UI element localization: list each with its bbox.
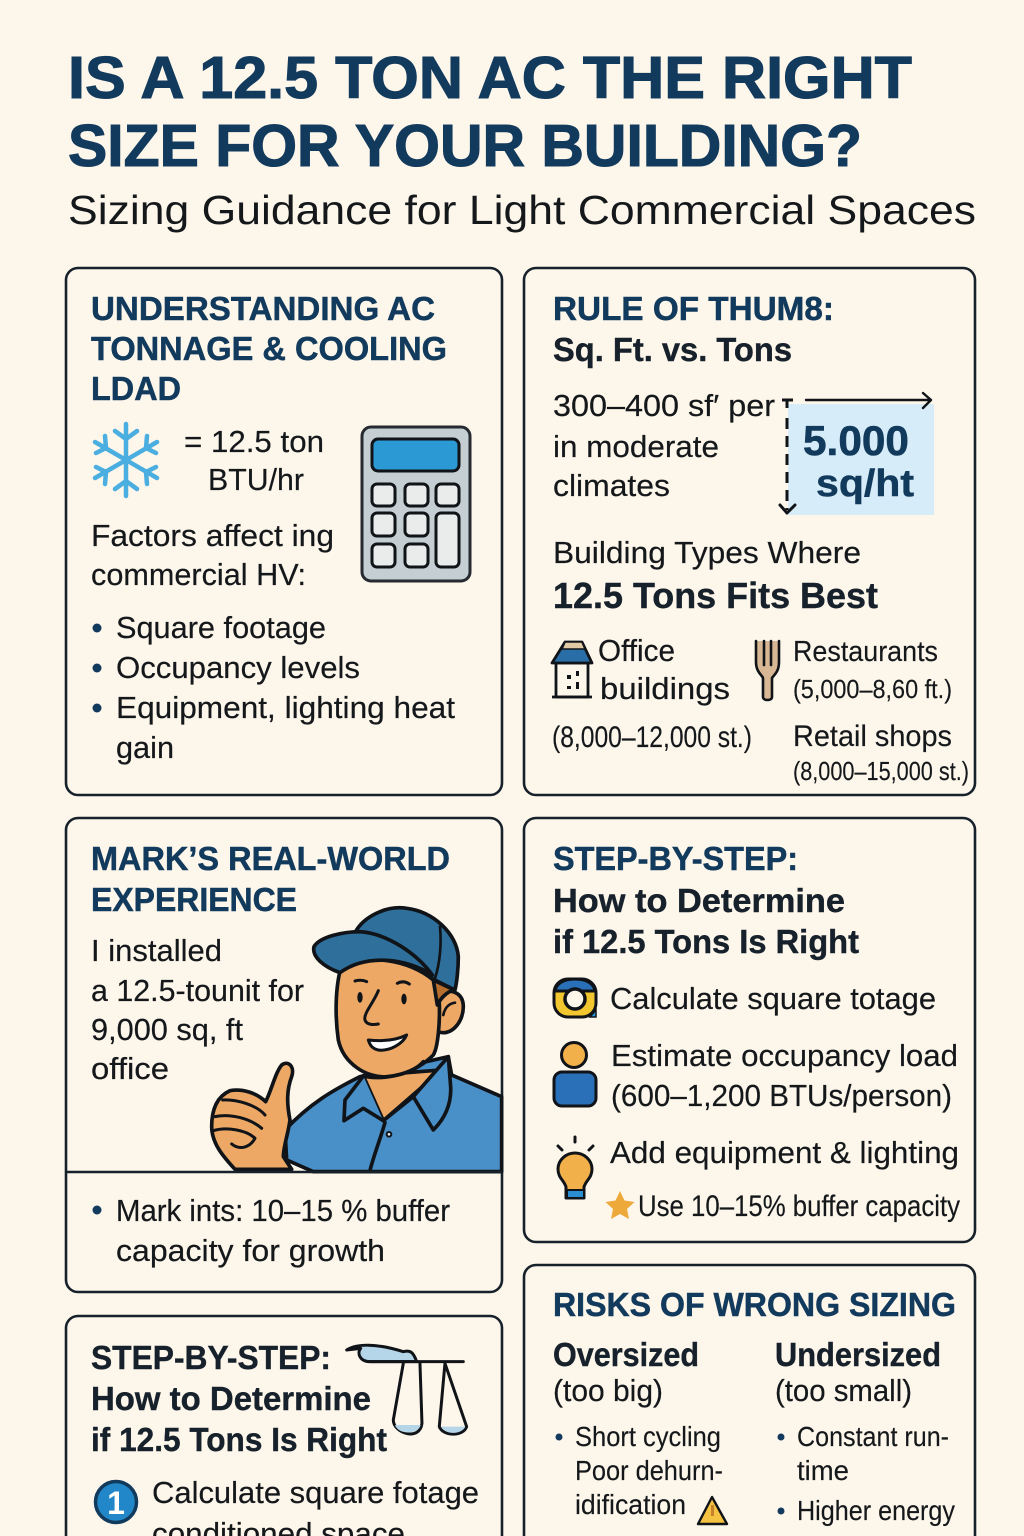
text: Mark's story: 9,000 sq, ft <box>91 1012 243 1047</box>
text: office buildings: buildings <box>600 671 730 706</box>
text: estimate occupancy <box>611 1038 958 1113</box>
heading: step-by-step: if 12.5 Tons Is Right <box>91 1421 387 1458</box>
text: Mark's story: a 12.5-tounit for <box>91 973 304 1008</box>
heading: rule of thumb <box>553 290 834 368</box>
icon: person <box>554 1042 596 1106</box>
column: undersized: Higher energy <box>797 1495 955 1526</box>
icon: office building <box>552 642 592 697</box>
list: factors: Equipment, lighting heat <box>116 690 455 725</box>
heading: step-by-step <box>553 840 859 960</box>
text: retail shops: (8,000–15,000 st.) <box>793 756 969 786</box>
panel: Mark's real-world experience <box>66 818 502 1292</box>
text: Mark's story: I installed <box>91 933 222 968</box>
heading: step-by-step: STEP-BY-STEP: <box>553 840 798 877</box>
list: Mark's tip: Mark ints: 10–15 % buffer <box>116 1193 450 1228</box>
text: add equipment: Add equipment & lighting <box>610 1135 959 1170</box>
heading: rule of thumb: Sq. Ft. vs. Tons <box>553 331 792 368</box>
heading: step-by-step: if 12.5 Tons Is Right <box>553 923 859 960</box>
text: factors: commercial HV: <box>91 557 306 592</box>
list: Mark's tip: capacity for growth <box>116 1233 385 1268</box>
column: undersized <box>775 1336 955 1526</box>
heading: risks: RISKS OF WRONG SIZING <box>553 1286 956 1323</box>
illustration: technician giving thumbs up <box>212 908 502 1172</box>
step 1 <box>96 1475 479 1536</box>
step 1: Calculate square fotage <box>152 1475 479 1510</box>
text: building types: Building Types Where <box>553 535 861 570</box>
text: estimate occupancy: (600–1,200 BTUs/person) <box>611 1078 952 1113</box>
icon: tape measure <box>554 979 596 1017</box>
column: oversized: Poor dehurn- <box>575 1455 723 1486</box>
list: factors: Occupancy levels <box>116 650 360 685</box>
text: rule description: in moderate <box>553 429 719 464</box>
text: retail shops: Retail shops <box>793 720 952 753</box>
heading: understanding AC tonnage: LDAD <box>91 370 181 407</box>
text: rule description <box>553 388 775 503</box>
text: factors <box>91 518 334 592</box>
arrow: depth dimension <box>780 400 795 513</box>
text: restaurants <box>793 636 952 704</box>
heading: understanding AC tonnage: UNDERSTANDING AC <box>91 290 435 327</box>
text: rule description: climates <box>553 468 670 503</box>
heading: step-by-step: How to Determine <box>91 1380 371 1417</box>
heading: understanding AC tonnage <box>91 290 447 407</box>
column: undersized: time <box>797 1455 849 1486</box>
panel: step-by-step with number <box>66 1316 502 1536</box>
heading: step-by-step <box>91 1339 387 1458</box>
arrow: width dimension <box>806 393 931 408</box>
title <box>68 45 912 179</box>
column: undersized: Undersized <box>775 1336 941 1373</box>
callout: 5,000 sq ft <box>788 404 934 515</box>
column: oversized: Oversized <box>553 1336 699 1373</box>
heading: rule of thumb: RULE OF THUM8: <box>553 290 834 327</box>
text: buffer capacity: Use 10–15% buffer capacity <box>638 1190 960 1223</box>
column: oversized: Short cycling <box>575 1421 721 1452</box>
icon: balance scale <box>347 1345 467 1434</box>
icon: snowflake <box>95 424 157 496</box>
text: ton equals BTU: BTU/hr <box>208 462 304 497</box>
text: ton equals BTU: = 12.5 ton <box>184 424 324 459</box>
callout: 5,000 sq ft: sq/ht <box>816 463 914 505</box>
icon: star <box>606 1191 634 1219</box>
column: oversized <box>553 1336 727 1524</box>
text: rule description: 300–400 sf′ per <box>553 388 775 423</box>
text: building types <box>553 535 878 616</box>
icon: calculator <box>362 427 470 581</box>
text: factors: Factors affect ing <box>91 518 334 553</box>
panel: step-by-step with icons <box>524 818 975 1242</box>
text: building types: 12.5 Tons Fits Best <box>553 575 878 616</box>
text: office buildings: Office <box>598 633 675 668</box>
panel: understanding AC tonnage <box>66 268 502 795</box>
subtitle: Sizing Guidance for Light Commercial Spaces <box>68 187 976 233</box>
column: oversized: (too big) <box>553 1373 663 1408</box>
text: estimate occupancy: Estimate occupancy load <box>611 1038 958 1073</box>
text: ton equals BTU <box>184 424 324 497</box>
heading: step-by-step: STEP-BY-STEP: <box>91 1339 331 1376</box>
text: restaurants: (5,000–8,60 ft.) <box>793 674 952 704</box>
text: retail shops <box>793 720 969 786</box>
heading: Mark's experience: MARK’S REAL-WORLD <box>91 840 450 877</box>
text: restaurants: Restaurants <box>793 636 938 668</box>
panel: rule of thumb <box>524 268 975 795</box>
text: office buildings: (8,000–12,000 st.) <box>552 721 752 754</box>
column: undersized: (too small) <box>775 1373 912 1408</box>
column: oversized: idification <box>575 1489 686 1520</box>
icon: fork <box>756 641 779 700</box>
callout: 5,000 sq ft: 5.000 <box>803 417 909 464</box>
icon: light bulb <box>558 1137 593 1198</box>
list: Mark's tip <box>92 1193 450 1268</box>
title: IS A 12.5 TON AC THE RIGHT <box>68 45 912 111</box>
text: Mark's story <box>91 933 304 1086</box>
heading: understanding AC tonnage: TONNAGE & COOLING <box>91 330 447 367</box>
list: factors: Square footage <box>116 610 326 645</box>
text: Mark's story: office <box>91 1051 169 1086</box>
panel: risks of wrong sizing <box>524 1265 975 1536</box>
heading: Mark's experience: EXPERIENCE <box>91 881 297 918</box>
heading: Mark's experience <box>91 840 450 918</box>
icon: warning triangle <box>698 1497 727 1524</box>
heading: step-by-step: How to Determine <box>553 882 845 919</box>
column: undersized: Constant run- <box>797 1421 949 1452</box>
list: factors: gain <box>116 730 174 765</box>
title: SIZE FOR YOUR BUILDING? <box>68 113 862 179</box>
list: factors <box>92 610 455 765</box>
text: calculate: Calculate square totage <box>610 981 936 1016</box>
step 1: 1 <box>107 1485 125 1521</box>
text: office buildings <box>552 633 752 754</box>
